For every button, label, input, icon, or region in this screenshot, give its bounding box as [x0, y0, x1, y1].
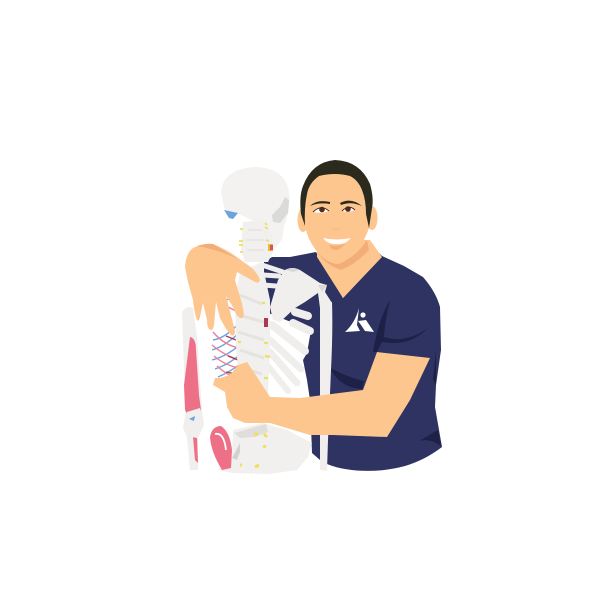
- left arm bone: [182, 307, 204, 470]
- ears: [298, 206, 378, 232]
- white rib cage over shirt: [264, 312, 311, 400]
- cervical spine: [239, 220, 273, 262]
- shirt logo: [345, 308, 374, 332]
- ribs right: [262, 265, 310, 391]
- red pelvis muscle: [210, 426, 232, 470]
- upper hand and forearm: [185, 244, 260, 336]
- mouth: [323, 238, 351, 244]
- neck shadow: [317, 240, 369, 270]
- scapula shadow: [286, 268, 327, 292]
- navy t-shirt: [264, 249, 442, 471]
- eyebrows: [310, 201, 362, 206]
- elbow joint: [183, 408, 204, 438]
- elbow blue detail: [189, 416, 195, 421]
- face: [304, 165, 371, 264]
- scapula: [270, 268, 332, 322]
- lower arm and fist: [213, 352, 430, 437]
- thoracic spine: [235, 262, 270, 395]
- ribs left with colored muscle stripes: [212, 296, 243, 381]
- pelvis muscle highlight: [215, 434, 226, 450]
- neck: [317, 240, 382, 298]
- lower lip: [329, 244, 345, 250]
- nose: [330, 227, 342, 230]
- red arm muscle: [184, 337, 201, 463]
- skeleton arm bone: right humerus: [320, 302, 332, 471]
- eyes: [313, 206, 355, 213]
- pelvis: [218, 423, 312, 474]
- forearm shadow: [197, 244, 240, 260]
- hair: [300, 160, 373, 228]
- skull: [221, 167, 289, 250]
